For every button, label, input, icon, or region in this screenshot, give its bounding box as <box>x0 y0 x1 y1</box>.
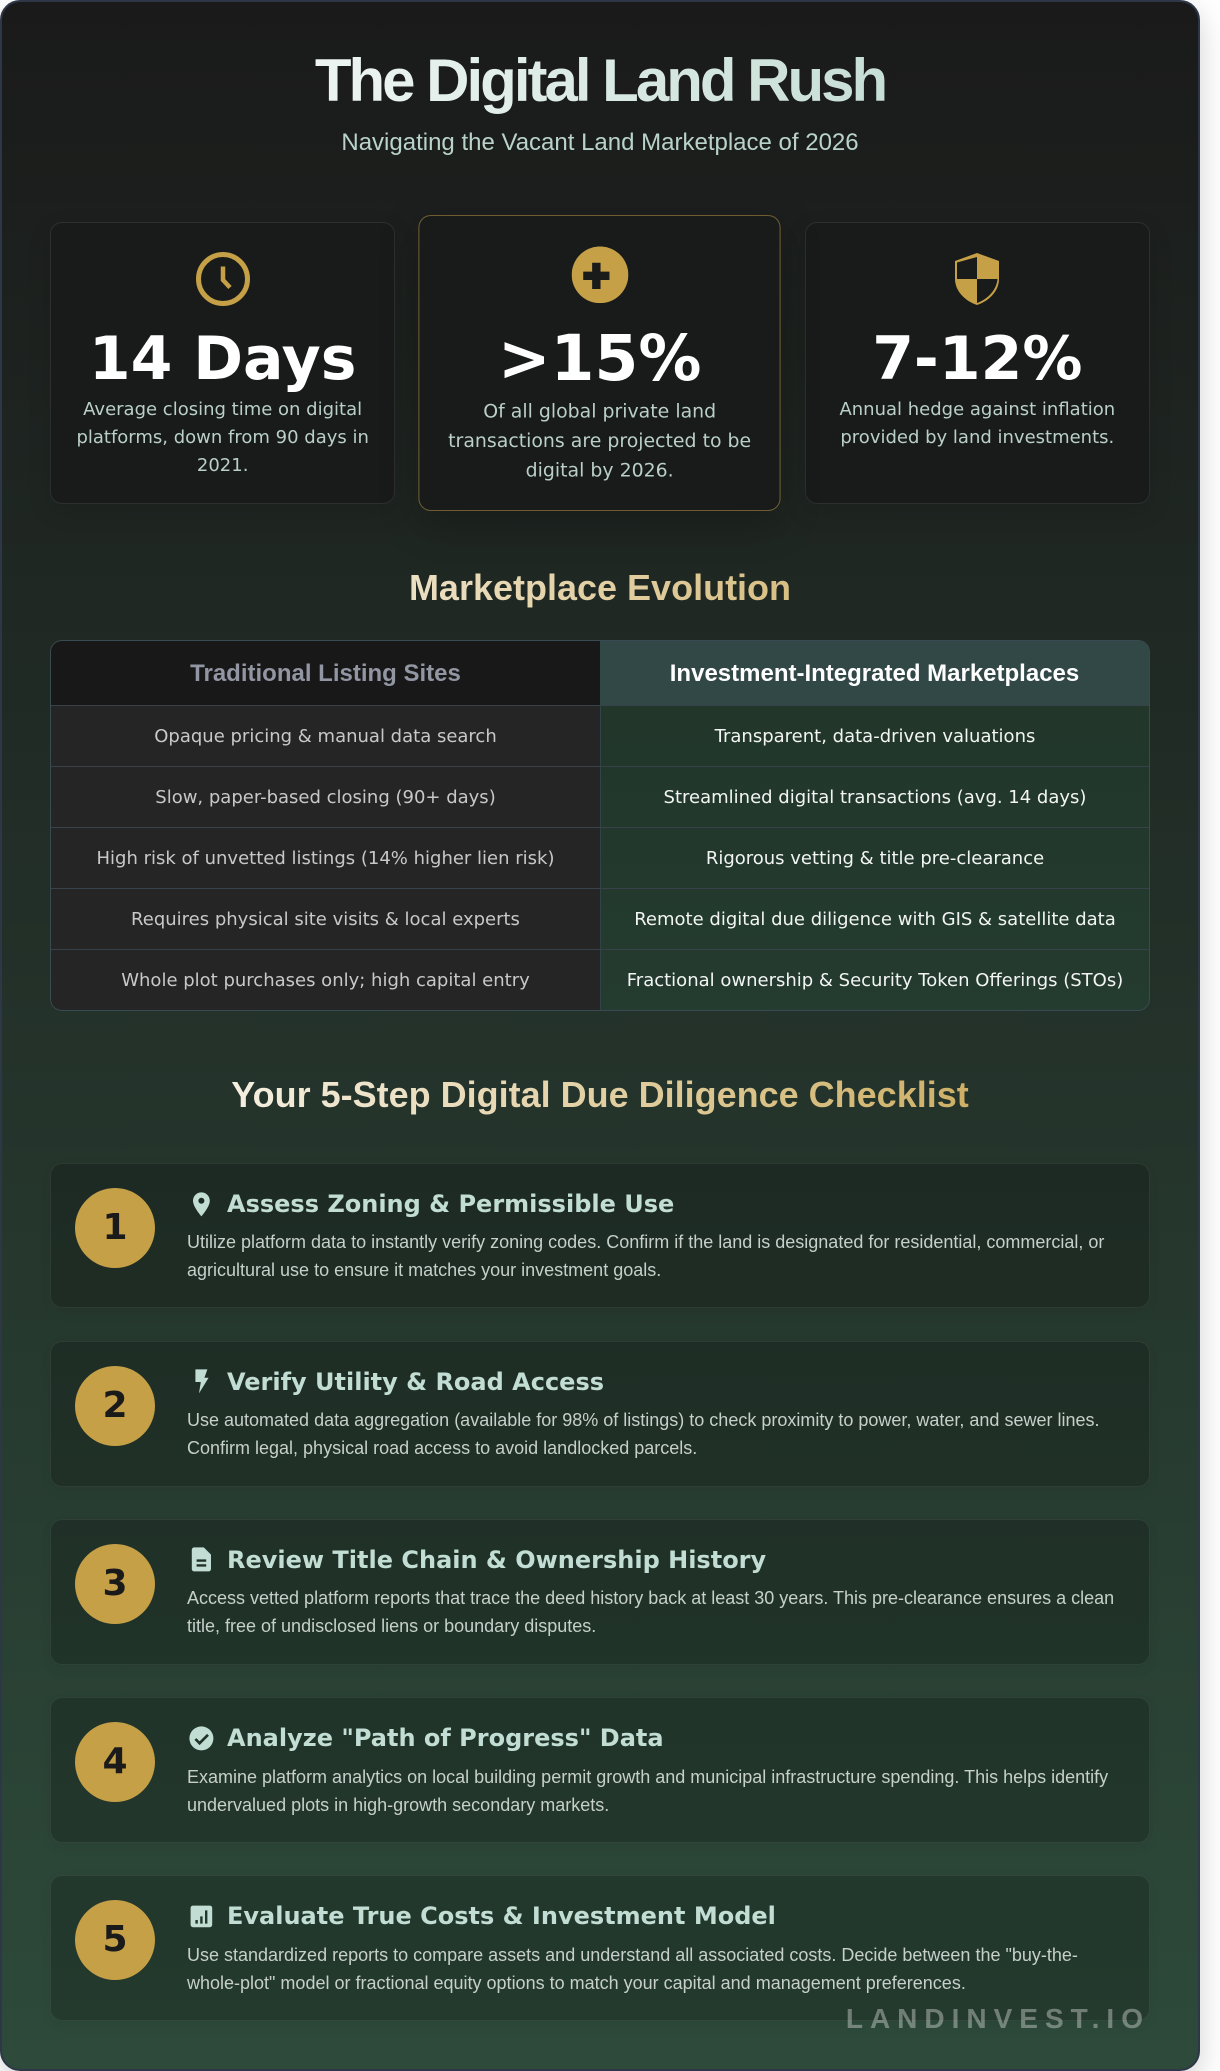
icon: check circle <box>189 1726 214 1750</box>
heading: checklist <box>50 1073 1150 1117</box>
brand watermark: LANDINVEST.IO <box>846 2003 1150 2034</box>
stat card: over 15 percent <box>419 214 781 511</box>
step 3 <box>50 1518 1150 1664</box>
number badge <box>75 1722 155 1802</box>
step title: Review Title Chain & Ownership History <box>227 1546 766 1574</box>
step 4 <box>50 1697 1150 1843</box>
table row 2: Streamlined digital transactions (avg. 14 days) <box>664 787 1086 808</box>
stat description: Of all global private land transactions are projected to be digital by 2026. <box>448 400 752 481</box>
number badge: 3 <box>102 1562 128 1604</box>
subtitle: Navigating the Vacant Land Marketplace of 2026 <box>341 129 859 156</box>
step title: Verify Utility & Road Access <box>227 1368 604 1396</box>
table header: Traditional Listing Sites <box>190 660 461 687</box>
table row 4: Remote digital due diligence with GIS & satellite data <box>634 909 1116 930</box>
table row 5: Fractional ownership & Security Token Offerings (STOs) <box>627 970 1123 991</box>
icon: shield <box>955 253 999 305</box>
table row 4: Requires physical site visits & local experts <box>131 909 520 930</box>
stat card: 14 days <box>50 222 395 504</box>
icon: clock <box>196 252 250 306</box>
step title: Evaluate True Costs & Investment Model <box>227 1902 776 1930</box>
stat value: 14 Days <box>89 324 356 394</box>
step text: Use automated data aggregation (available for 98% of listings) to check proximity to power, water, and sewer lines. Confirm legal, physical road access to avoid landlocked parcels. <box>187 1410 1099 1458</box>
table row 3: High risk of unvetted listings (14% higher lien risk) <box>97 848 554 869</box>
stat description: Average closing time on digital platforms, down from 90 days in 2021. <box>76 398 369 476</box>
table row 3: Rigorous vetting & title pre-clearance <box>706 848 1044 869</box>
number badge <box>75 1544 155 1624</box>
table row 4 <box>51 888 1149 949</box>
icon: map pin <box>193 1192 210 1216</box>
step title: Assess Zoning & Permissible Use <box>227 1190 674 1218</box>
number badge: 5 <box>102 1919 128 1960</box>
heading: marketplace evolution <box>50 566 1150 610</box>
stat description: Annual hedge against inflation provided by land investments. <box>839 398 1115 448</box>
table row 1 <box>51 705 1149 766</box>
heading: marketplace evolution: Marketplace Evolution <box>409 567 791 608</box>
icon: document <box>192 1547 211 1572</box>
number badge <box>75 1188 155 1268</box>
comparison table <box>50 640 1150 1011</box>
number badge <box>75 1900 155 1980</box>
table header: Investment-Integrated Marketplaces <box>670 660 1079 687</box>
step text: Access vetted platform reports that trace the deed history back at least 30 years. This pre-clearance ensures a clean title, free of undisclosed liens or boundary disputes. <box>187 1588 1114 1636</box>
icon: plus in circle <box>572 246 628 304</box>
stat value: >15% <box>498 322 702 395</box>
number badge: 2 <box>102 1384 128 1426</box>
icon: bar chart <box>190 1906 212 1928</box>
table row 3 <box>51 827 1149 888</box>
title <box>50 44 1150 116</box>
step title: Analyze "Path of Progress" Data <box>227 1724 664 1752</box>
title: The Digital Land Rush <box>315 46 885 114</box>
number badge <box>75 1366 155 1446</box>
table header <box>51 641 1149 705</box>
table row 1: Transparent, data-driven valuations <box>715 726 1035 747</box>
step text: Utilize platform data to instantly verify zoning codes. Confirm if the land is designated for residential, commercial, or agricultural use to ensure it matches your investment goals. <box>187 1232 1104 1280</box>
stat value: 7-12% <box>872 324 1082 394</box>
number badge: 4 <box>102 1741 128 1782</box>
step text: Use standardized reports to compare assets and understand all associated costs. Decide between the "buy-the-whole-plot" model or fractional equity options to match your capital and management preferences. <box>187 1944 1078 1992</box>
table row 2: Slow, paper-based closing (90+ days) <box>155 787 496 808</box>
table row 5 <box>51 949 1149 1010</box>
table row 5: Whole plot purchases only; high capital entry <box>121 970 530 991</box>
number badge: 1 <box>102 1207 128 1248</box>
stat card: 7-12 percent <box>805 222 1150 504</box>
step 5 <box>50 1875 1150 2021</box>
step 2 <box>50 1340 1150 1486</box>
step text: Examine platform analytics on local building permit growth and municipal infrastructure spending. This helps identify undervalued plots in high-growth secondary markets. <box>187 1766 1108 1814</box>
step 1 <box>50 1163 1150 1308</box>
table row 2 <box>51 766 1149 827</box>
heading: checklist: Your 5-Step Digital Due Diligence Checklist <box>231 1074 969 1115</box>
table row 1: Opaque pricing & manual data search <box>154 726 497 747</box>
icon: lightning bolt <box>195 1369 208 1394</box>
